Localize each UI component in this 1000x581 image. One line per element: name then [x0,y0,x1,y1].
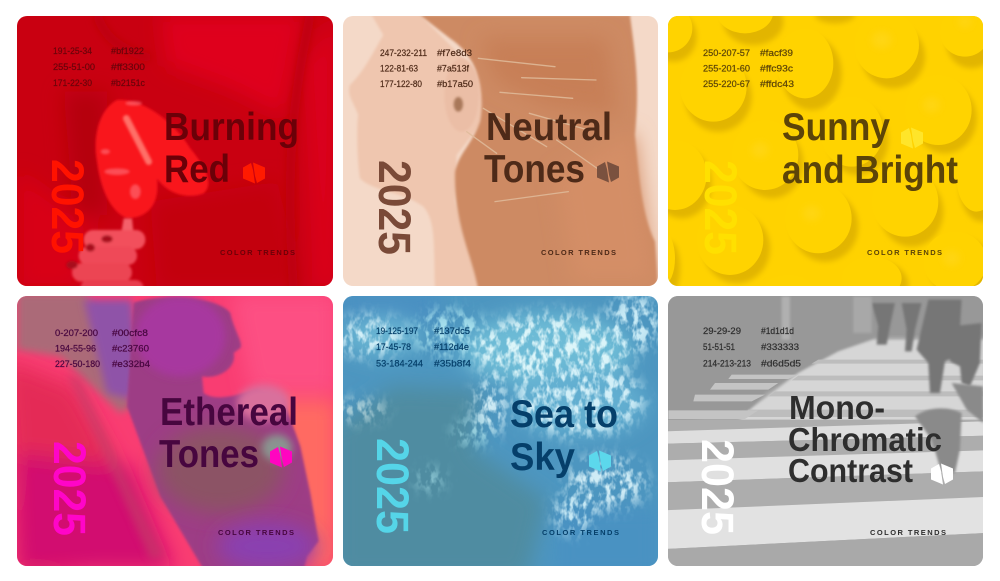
photo: blue foliage texture [333,293,660,580]
panel: Burning Red [17,15,337,297]
colour codes: 0-207-200 [55,328,98,338]
colour codes: 255-201-60 [703,64,750,74]
colour codes [703,326,801,368]
title [510,393,618,479]
title: Burning [164,106,299,149]
colour codes: 194-55-96 [55,344,96,354]
photo: figure in pink and purple light [17,296,333,566]
colour codes: 227-50-180 [55,359,100,369]
photo: hand holding red anthurium [17,15,337,297]
colour codes: 122-81-63 [380,64,418,74]
hand [66,218,145,297]
photo: pedestrian crossing [665,293,985,570]
title [788,389,942,489]
colour codes [703,48,794,89]
panel: Ethereal Tones [17,296,333,566]
colour codes: 19-125-197 [376,326,418,336]
colour codes: #f7e8d3 [437,48,472,58]
icon: logo mark [931,464,953,484]
colour codes [376,326,471,368]
colour codes: 29-29-29 [703,326,741,336]
colour codes: #b2151c [111,78,145,88]
title [159,391,298,476]
colour codes: #1d1d1d [761,326,794,336]
icon: logo mark [270,446,292,468]
icon: logo mark [597,162,619,182]
title: Neutral [486,106,612,149]
colour codes: 255-51-00 [53,62,95,72]
colour codes: #7a513f [437,64,469,74]
year 2025: 2025 [369,160,420,255]
colour codes: 17-45-78 [376,342,411,352]
colour codes: 255-220-67 [703,79,750,89]
year 2025: 2025 [692,439,743,535]
title [164,106,299,191]
title: Contrast [788,452,913,489]
year 2025: 2025 [367,438,418,534]
photo: profile with hair pins [340,15,660,290]
colour codes: 247-232-211 [380,48,427,58]
title: Red [164,148,230,191]
colour codes: #00cfc8 [112,328,148,338]
colour codes: #333333 [761,342,799,352]
colour codes: 177-122-80 [380,79,422,89]
icon: logo mark [901,128,923,148]
colour codes: 191-25-34 [53,46,92,56]
title: Sunny [782,106,890,149]
colour codes [380,48,473,89]
panel: Sunny and Bright [668,16,983,286]
colour codes: #e332b4 [112,359,150,369]
colour codes: #d6d5d5 [761,358,801,368]
colour codes: #bf1922 [111,46,144,56]
colour codes: 53-184-244 [376,358,423,368]
panel: Sea to Sky [333,293,660,580]
footer label: COLOR TRENDS [220,248,295,257]
colour codes: 214-213-213 [703,358,751,368]
title: Sky [510,436,575,479]
colour codes: #b17a50 [437,79,473,89]
colour codes: #35b8f4 [434,358,471,368]
colour codes [53,46,145,88]
panel: Neutral Tones [340,15,660,290]
year 2025: 2025 [695,160,746,255]
footer label: COLOR TRENDS [542,528,619,537]
title [484,106,612,191]
title: Sea to [510,393,618,436]
panel: Mono-Chromatic Contrast [665,293,985,570]
colour codes: 171-22-30 [53,78,92,88]
title [782,106,958,192]
colour codes: #ffc93c [760,64,794,74]
pedestrians [872,300,982,393]
figure body [127,298,319,570]
title: Mono- [789,389,885,426]
colour codes: 51-51-51 [703,342,735,352]
year 2025: 2025 [44,441,95,536]
footer label: COLOR TRENDS [870,528,946,537]
footer label: COLOR TRENDS [218,528,294,537]
colour codes: #ffdc43 [760,79,794,89]
title: Chromatic [788,421,942,458]
colour codes: 250-207-57 [703,48,750,58]
colour codes: #c23760 [112,344,149,354]
colour codes [55,328,150,369]
colour codes: #facf39 [760,48,793,58]
colour codes: #ff3300 [111,62,145,72]
colour codes: #112d4e [434,342,469,352]
year 2025: 2025 [42,159,93,254]
colour codes: #137dc5 [434,326,470,336]
title: and Bright [782,149,958,192]
icon: logo mark [243,162,265,184]
title: Tones [159,433,259,476]
photo: lemons [668,16,983,286]
title: Ethereal [160,391,298,434]
title: Tones [484,148,585,191]
flower lobes [96,100,208,218]
icon: logo mark [589,450,611,472]
footer label: COLOR TRENDS [541,248,616,257]
footer label: COLOR TRENDS [867,248,942,257]
